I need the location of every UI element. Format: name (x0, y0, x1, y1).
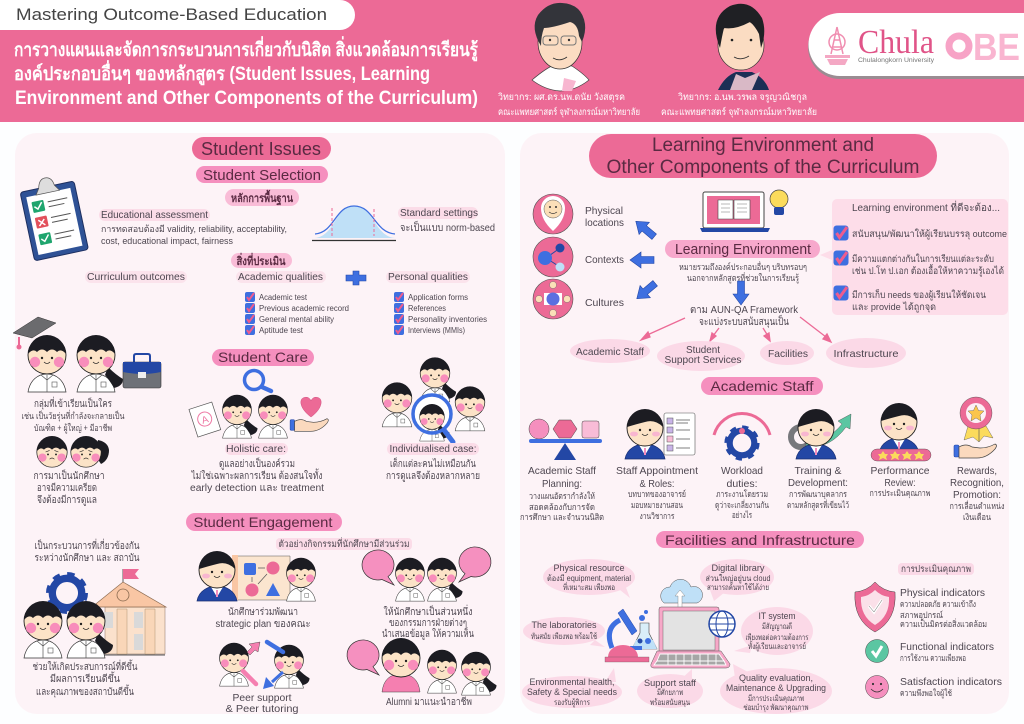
text: engagement definition (34, 538, 140, 564)
text: strategic plan: นักศึกษาร่วมพัฒนา (228, 606, 298, 618)
bubble: physical resource: Physical resource (554, 563, 624, 574)
subheading: basic principles (225, 189, 299, 206)
text: engagement benefits: และคุณภาพของสถาบันดีขึ้น (36, 684, 134, 698)
illustration: individual students with magnifier (382, 357, 485, 442)
bubble: environmental health: Environmental health, (530, 677, 614, 688)
list: personal qualities: Personality inventories (408, 315, 487, 324)
item: training: Development: (788, 477, 848, 489)
label: curriculum outcomes: Curriculum outcomes (87, 271, 185, 283)
bubble: IT system: เพียงพอต่อความต้องการ (746, 633, 809, 642)
text: stress note: อาจมีความเครียด (37, 482, 97, 494)
list: personal qualities (394, 292, 487, 335)
text: stress note (34, 468, 104, 506)
text: satisfaction indicators: Satisfaction indicators (900, 676, 1002, 688)
series title pill (0, 0, 355, 30)
subheading: what to assess (231, 252, 292, 268)
item: staff appointment: Staff Appointment (616, 465, 698, 477)
box: good learning environment (820, 199, 1008, 315)
label: cultures: Cultures (585, 297, 624, 309)
icon: graduation cap (13, 317, 56, 350)
text: educational assessment: Educational assessment (101, 209, 208, 221)
main Thai/English title: องค์ประกอบอื่นๆ ของหลักสูตร (Student Issues, Learning (14, 60, 430, 86)
label: physical locations: locations (585, 217, 624, 229)
main Thai/English title: Environment and Other Components of the Curriculum) (15, 88, 478, 109)
text: individualised case: Individualised case: (390, 444, 476, 455)
icon: graded paper (189, 402, 221, 437)
text: committee: นำเสนอข้อมูล ให้ความเห็น (382, 626, 474, 640)
text: physical indicators (900, 587, 987, 629)
text: educational assessment (99, 209, 287, 246)
icon: lecturer with stars (871, 403, 931, 461)
item: staff planning: Academic Staff (528, 465, 596, 477)
text: satisfaction indicators (900, 676, 1002, 699)
bubble: quality evaluation (720, 664, 832, 714)
icon: cultures circle (533, 279, 573, 319)
label: physical locations (585, 205, 624, 229)
heading: Student Engagement: Student Engagement (194, 514, 333, 530)
item: rewards (950, 397, 1004, 522)
item: performance review: Review: (884, 477, 916, 489)
item: workload: Workload (721, 465, 763, 477)
icon: lecturer with growth arrow (791, 409, 851, 459)
item: staff appointment: งานวิชาการ (640, 511, 675, 521)
text: who the learners are: บัณฑิต + ผู้ใหญ่ + มีอาชีพ (34, 423, 112, 434)
bubble: quality evaluation: ซ่อมบำรุง พัฒนาคุณภาพ (744, 703, 808, 712)
item: performance review (870, 403, 931, 499)
illustration: strategic plan (197, 551, 315, 601)
icon: light bulb (770, 190, 788, 215)
label: academic qualities: Academic qualities (238, 271, 323, 283)
speaker 1 caption (497, 92, 640, 118)
text: committee (382, 604, 474, 640)
list: personal qualities: Application forms (408, 293, 468, 302)
heading: Facilities and Infrastructure: Facilities and Infrastructure (665, 532, 855, 548)
text: satisfaction indicators: ความพึงพอใจผู้ใช้ (900, 688, 952, 699)
label: student support services (657, 341, 745, 371)
main Thai/English title (14, 36, 479, 109)
illustration: institution building (92, 569, 166, 655)
illustration: stressed students (37, 436, 109, 467)
illustration: microscope and flask (605, 609, 657, 662)
logo pill: Chula OBE (808, 13, 1024, 79)
item: training: ตามหลักสูตรที่เขียนไว้ (787, 499, 849, 511)
item: rewards: การเลื่อนตำแหน่ง (950, 500, 1004, 511)
label: contexts: Contexts (585, 254, 624, 266)
icon: green check (866, 640, 888, 662)
item: staff appointment (616, 409, 698, 521)
bubble: laboratories: ทันสมัย เพียงพอ พร้อมใช้ (531, 632, 597, 641)
bubble: digital library (700, 559, 774, 601)
speaker 2 caption: วิทยากร: อ.นพ.วรพล จรูญวณิชกูล (677, 92, 807, 103)
text: stress note: การมาเป็นนักศึกษา (34, 468, 104, 482)
bubble: environmental health: Safety & Special needs (527, 687, 617, 698)
item: staff appointment: บทบาทของอาจารย์ (628, 489, 686, 499)
list: academic qualities: Previous academic record (259, 304, 349, 313)
item: staff appointment: & Roles: (640, 478, 674, 490)
icon: gear (48, 574, 86, 612)
arrows: framework branches (641, 317, 831, 342)
item: training: Training & (794, 465, 842, 477)
text: peer support (226, 692, 299, 715)
text: peer support: Peer support (232, 692, 292, 704)
series title pill: Mastering Outcome-Based Education (16, 5, 327, 24)
icon: laptop with book (700, 192, 770, 232)
heading: Academic Staff: Academic Staff (710, 378, 814, 394)
icon: contexts circle (533, 237, 573, 277)
list: academic qualities: General mental ability (259, 315, 334, 324)
logo pill: Chula OBE: Chula (858, 24, 934, 61)
text: committee: ของกรรมการฝ่ายต่างๆ (389, 618, 467, 629)
portrait: speaker 2 (716, 4, 769, 90)
heading: Student Selection: Student Selection (203, 167, 321, 184)
item: workload: ภาระงานโดยรวม (716, 489, 768, 499)
item: training (787, 409, 851, 511)
item: staff planning: วางแผนอัตรากำลังให้ (529, 491, 595, 501)
box: good learning environment: มีความแตกต่างกันในการเรียนแต่ละระดับ (852, 253, 994, 265)
illustration: laptop with cloud and globe (651, 579, 735, 668)
arrow: to locations (631, 215, 659, 243)
text: functional indicators (900, 641, 994, 663)
bubble: environmental health: รองรับผู้พิการ (554, 698, 591, 708)
text: AUN-QA framework (690, 304, 799, 328)
text: engagement definition: ระหว่างนักศึกษา และ สถาบัน (34, 552, 140, 564)
text: strategic plan (216, 606, 310, 630)
header banner (0, 0, 1024, 122)
illustration: holistic care students (223, 395, 287, 438)
icon: heart in hand (290, 397, 328, 431)
bubble: quality evaluation: Maintenance & Upgrading (726, 683, 826, 694)
box: good learning environment: สนับสนุน/พัฒนาให้ผู้เรียนบรรลุ outcome (852, 228, 1007, 240)
subheading: basic principles: หลักการพื้นฐาน (231, 189, 293, 206)
text: educational assessment: cost, educational impact, fairness (101, 236, 233, 246)
text: holistic care (190, 443, 324, 494)
panel: Student Issues (13, 133, 505, 715)
bubble: physical resource: ต้องมี equipment, material (547, 574, 631, 583)
text: functional indicators: การใช้งาน ความเพียงพอ (900, 653, 966, 663)
text: who the learners are: เช่น เป็นวัยรุ่นที่กำลังจะกลายเป็น (22, 409, 124, 422)
text: holistic care: Holistic care: (226, 444, 286, 455)
bubble: physical resource (543, 559, 635, 598)
bubble: support staff: มีศักยภาพ (657, 688, 683, 697)
box: good learning environment: เช่น ป.โท ป.เอก ต้องเอื้อให้หาความรู้เองได้ (852, 264, 1004, 277)
text: individualised case: การดูแลจึงต้องหลากหลาย (386, 470, 480, 482)
main Thai/English title: การวางแผนและจัดการกระบวนการเกี่ยวกับนิสิต สิ่งแวดล้อมการเรียนรู้ (14, 36, 479, 62)
illustration: alumni (347, 638, 497, 695)
box: good learning environment: Learning environment ที่ดีจะต้อง... (852, 200, 1000, 214)
item: staff planning: การศึกษา และจำนวนนิสิต (520, 512, 604, 522)
label: student support services: Support Services (664, 354, 742, 366)
label: personal qualities: Personal qualities (388, 271, 468, 283)
text: physical indicators: ความเป็นมิตรต่อสิ่งแวดล้อม (900, 618, 987, 629)
subheading: what to assess: สิ่งที่ประเมิน (236, 252, 286, 268)
bubble: support staff (637, 669, 703, 708)
item: performance review: การประเมินคุณภาพ (870, 488, 930, 499)
label: academic staff (570, 339, 650, 363)
bubble: IT system: ทั้งผู้เรียนและอาจารย์ (748, 640, 806, 652)
box: good learning environment: มีการเก็บ needs ของผู้เรียนให้ชัดเจน (852, 288, 986, 301)
text: who the learners are (22, 396, 124, 434)
label: sample activities: ตัวอย่างกิจกรรมที่นักศึกษามีส่วนร่วม (278, 537, 410, 550)
list: personal qualities: Interviews (MMIs) (408, 326, 465, 335)
label: student support services: Student (686, 344, 720, 356)
bubble: IT system: มีสัญญาณดี (762, 622, 792, 631)
heading: Student Care: Student Care (218, 349, 308, 365)
bubble: digital library: Digital library (712, 563, 765, 574)
speaker 2 caption (661, 92, 817, 118)
icon: location circle (533, 194, 573, 234)
arrow: to cultures (632, 277, 660, 305)
bubble: physical resource: ที่เหมาะสม เพียงพอ (563, 581, 615, 592)
icon: magnifier (244, 370, 271, 391)
icon: briefcase (123, 354, 161, 388)
illustration: committee students (362, 547, 491, 601)
text: alumni: Alumni มาแนะนำอาชีพ (386, 696, 472, 708)
text: standard settings: จะเป็นแบบ norm-based (400, 220, 495, 234)
item: workload: อย่างไร (732, 510, 752, 520)
text: definition: หมายรวมถึงองค์ประกอบอื่นๆ บริบทรอบๆ (679, 261, 807, 272)
bubble: digital library: สามารถค้นหาใช้ได้ง่าย (707, 583, 769, 592)
heading: Student Issues: Student Issues (201, 139, 321, 159)
item: staff appointment: มอบหมายงานสอน (631, 500, 683, 510)
text: functional indicators: Functional indicators (900, 641, 994, 653)
item: rewards: Recognition, (950, 477, 1004, 489)
bubble: digital library: ส่วนใหญ่อยู่บน cloud (706, 574, 770, 584)
label: facilities: Facilities (768, 348, 808, 360)
text: committee: ให้นักศึกษาเป็นส่วนหนึ่ง (384, 604, 473, 618)
label: academic staff: Academic Staff (576, 346, 644, 358)
item: staff planning (520, 419, 604, 522)
speaker 2 caption: คณะแพทยศาสตร์ จุฬาลงกรณ์มหาวิทยาลัย (661, 106, 817, 118)
text: individualised case (386, 443, 480, 482)
heading: Academic Staff (701, 377, 823, 395)
label: physical locations: Physical (585, 205, 623, 217)
bubble: environmental health (522, 668, 622, 708)
icon: lecturer with checklist (625, 409, 695, 459)
text: individualised case: เด็กแต่ละคนไม่เหมือนกัน (390, 456, 476, 470)
text: engagement benefits: มีผลการเรียนดีขึ้น (50, 671, 120, 685)
text: physical indicators: ความปลอดภัย ความเข้าถึง (900, 599, 976, 609)
icon: gauge and gear (714, 414, 770, 459)
text: definition: นอกจากหลักสูตรที่ช่วยในการเรียนรู้ (687, 272, 799, 284)
item: training: การพัฒนาบุคลากร (789, 489, 847, 500)
item: rewards: Rewards, (957, 465, 997, 477)
text: holistic care: ไม่ใช่เฉพาะผลการเรียน ต้องสนใจทั้ง (191, 468, 323, 482)
item: rewards: เงินเดือน (963, 512, 991, 522)
text: AUN-QA framework: ตาม AUN-QA Framework (690, 304, 799, 316)
label: infrastructure (826, 338, 906, 368)
arrow: down (733, 281, 749, 305)
text: AUN-QA framework: จะแบ่งระบบสนับสนุนเป็น (699, 314, 789, 328)
text: engagement benefits (32, 659, 138, 698)
text: who the learners are: กลุ่มที่เข้าเรียนเป็นใคร (34, 396, 113, 410)
item: workload: ดูว่าจะเกลี่ยงานกัน (715, 499, 769, 511)
item: staff planning: สอดคล้องกับการจัด (529, 502, 595, 512)
item: workload: duties: (726, 478, 758, 490)
text: peer support: & Peer tutoring (226, 703, 299, 715)
label: quality assessment: การประเมินคุณภาพ (901, 564, 971, 575)
icon: smiley (866, 676, 888, 698)
bubble: support staff: Support staff (644, 678, 696, 689)
bubble: laboratories (523, 617, 605, 647)
illustration: peer support (220, 642, 310, 689)
portrait: speaker 1 (532, 3, 589, 91)
text: definition (679, 261, 807, 284)
icon: plus (346, 271, 366, 285)
heading: Learning Environment and Other Components: Learning Environment and (652, 135, 874, 156)
heading: Learning Environment and Other Components (589, 134, 937, 178)
heading: Learning Environment: Learning Environment (675, 242, 811, 258)
bubble: support staff: พร้อมสนับสนุน (650, 698, 690, 707)
item: staff planning: Planning: (542, 478, 582, 490)
list: academic qualities: Academic test (259, 293, 308, 302)
logo pill: Chula OBE: Chulalongkorn University (858, 57, 935, 64)
icon: balance (529, 419, 602, 460)
text: physical indicators: สภาพอุปกรณ์ (900, 610, 943, 621)
text: standard settings (398, 207, 495, 234)
illustration: students at institution (24, 601, 113, 658)
label: facilities (760, 341, 814, 365)
bubble: quality evaluation: Quality evaluation, (739, 673, 813, 684)
bubble: laboratories: The laboratories (532, 620, 597, 631)
text: holistic care: early detection และ treatment (190, 483, 324, 494)
icon: rosette and hand (954, 397, 996, 458)
heading: Learning Environment and Other Components: Other Components of the Curriculum (606, 157, 920, 178)
text: standard settings: Standard settings (400, 207, 478, 219)
item: workload (714, 414, 770, 520)
icon: clipboard (18, 172, 88, 261)
text: holistic care: ดูแลอย่างเป็นองค์รวม (219, 456, 295, 470)
illustration: two students (28, 335, 123, 392)
text: educational assessment: การทดสอบต้องมี validity, reliability, acceptability, (101, 224, 287, 234)
chart: bell curve (312, 206, 396, 240)
bubble: quality evaluation: มีการประเมินคุณภาพ (748, 694, 804, 703)
text: strategic plan: strategic plan ของคณะ (216, 619, 310, 630)
text: engagement benefits: ช่วยให้เกิดประสบการณ์ที่ดีขึ้น (32, 659, 138, 673)
list: personal qualities: References (408, 304, 446, 313)
item: rewards: Promotion: (953, 489, 1001, 501)
speaker 1 caption: วิทยากร: ผศ.ดร.นพ.ดนัย วังสตุรค (497, 92, 625, 103)
list: academic qualities: Aptitude test (259, 326, 304, 335)
text: engagement definition: เป็นกระบวนการที่เกี่ยวข้องกัน (34, 538, 140, 552)
bubble: IT system (734, 607, 813, 655)
item: performance review: Performance (870, 465, 930, 477)
text: physical indicators: Physical indicators (900, 587, 985, 599)
speaker 1 caption: คณะแพทยศาสตร์ จุฬาลงกรณ์มหาวิทยาลัย (498, 106, 640, 118)
bubble: IT system: IT system (758, 611, 796, 622)
icon: graded paper: A (200, 414, 210, 427)
box: good learning environment: และ provide ได้ถูกจุด (852, 301, 936, 313)
list: academic qualities (245, 292, 349, 335)
panel: Learning Environment and Other Components (520, 133, 1009, 714)
label: infrastructure: Infrastructure (834, 348, 899, 360)
arrow: to contexts (630, 252, 654, 268)
icon: shield (855, 582, 895, 632)
text: stress note: จึงต้องมีการดูแล (37, 494, 97, 506)
